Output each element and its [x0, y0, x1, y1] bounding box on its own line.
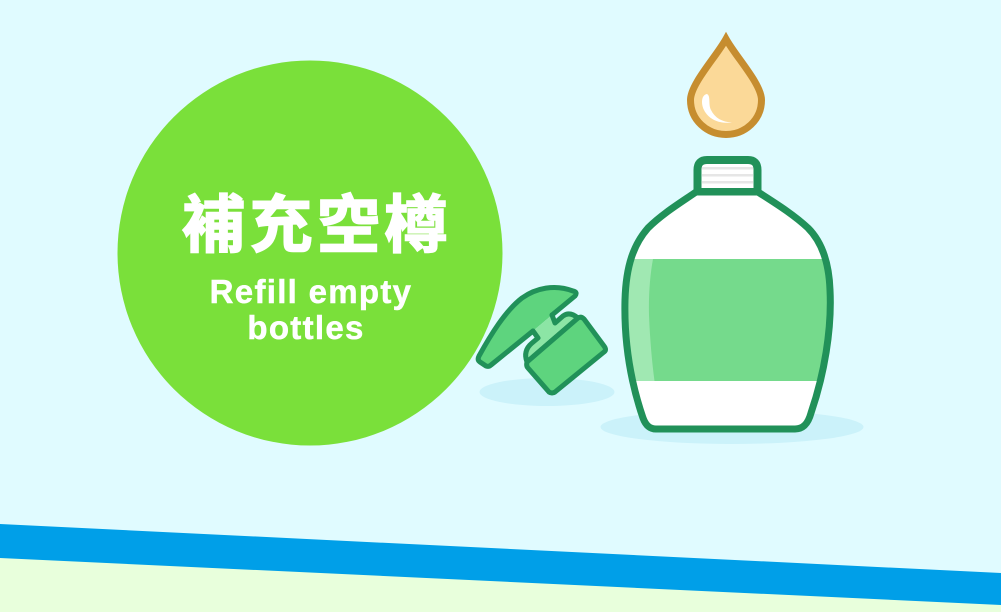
title: English subheading — [210, 273, 412, 346]
bottle outline — [625, 192, 830, 429]
shadow: pump head — [480, 378, 614, 406]
bottle cap neck — [698, 160, 758, 192]
heading circle — [118, 60, 502, 446]
title: Chinese heading: 補充空樽 — [182, 191, 452, 261]
bottle label — [626, 259, 830, 381]
drop highlight — [702, 94, 732, 123]
icon: pump head — [478, 287, 606, 393]
bottle body — [625, 192, 830, 429]
title: English subheading: Refill empty — [210, 273, 412, 310]
label highlight — [626, 259, 654, 381]
bottom diagonal bands — [0, 524, 1001, 612]
title: English subheading: bottles — [247, 309, 365, 346]
pump base — [527, 317, 606, 393]
pump top spout — [478, 287, 576, 366]
shadow: bottle — [600, 410, 864, 444]
icon: bottle — [625, 160, 830, 429]
icon: oil drop — [690, 39, 762, 134]
pump dome and neck — [526, 314, 578, 362]
